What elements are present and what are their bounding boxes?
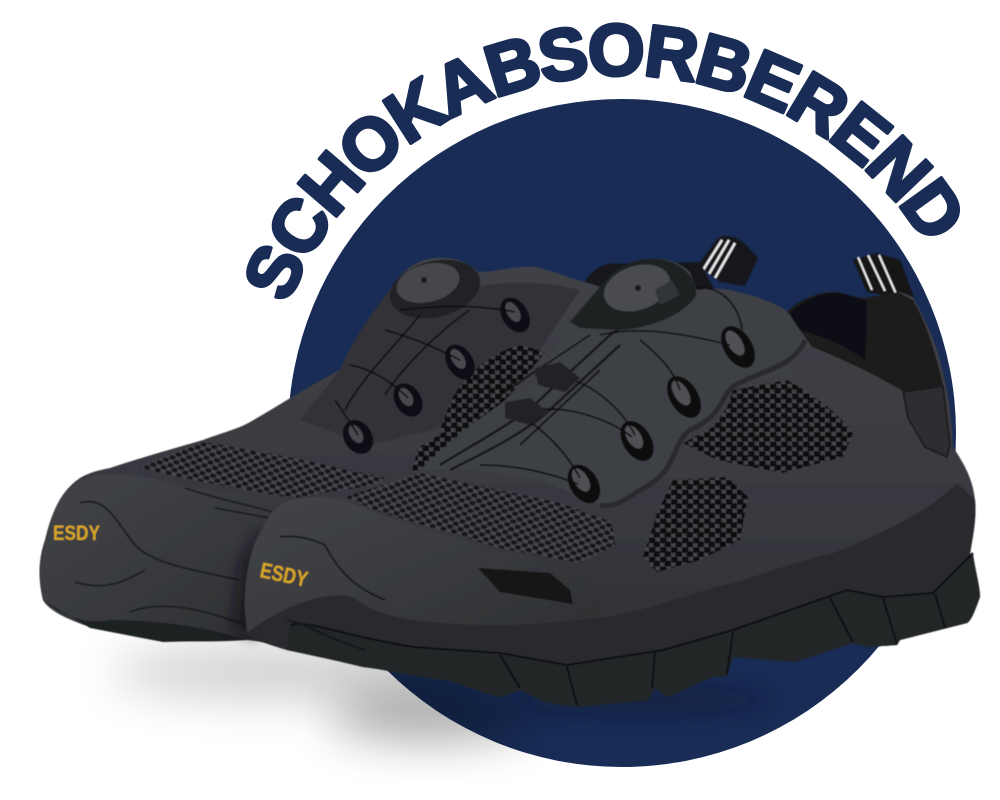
front shoe toe mesh [345, 473, 615, 563]
front shoe inner opening [790, 293, 867, 360]
front shoe heel lining [787, 292, 943, 392]
front shoe outsole lugs [287, 553, 980, 707]
back shoe silhouette [39, 258, 640, 650]
front shoe ESDY logo: ESDY [258, 557, 310, 592]
front shoe eyelets [561, 320, 762, 509]
front shoe midsole [247, 483, 980, 707]
front shoe [245, 253, 980, 707]
front shoe silhouette [245, 259, 980, 707]
back shoe lower honeycomb [412, 425, 480, 478]
front shoe side mesh lower [643, 477, 748, 572]
back shoe eyelets [337, 292, 536, 460]
front shoe tread grooves [290, 553, 973, 705]
front shoe lace panel edge [600, 340, 805, 506]
back shoe sole lines [75, 488, 272, 625]
shade between the two toes [232, 525, 262, 640]
front shoe toe cap [245, 497, 605, 650]
back shoe [39, 236, 758, 650]
back shoe collar [583, 262, 720, 320]
front shoe laces [480, 288, 742, 484]
navy circle background [288, 99, 956, 767]
front shoe lace guides [505, 362, 580, 425]
front shoe pull tab [853, 253, 914, 310]
curved title: SCHOKABSORBEREND [246, 22, 960, 300]
front shoe side reinforcement strip [478, 568, 573, 604]
ground shadow [110, 646, 770, 739]
front shoe dial [570, 257, 696, 330]
back shoe inner honeycomb [440, 345, 545, 440]
back shoe laces [335, 306, 515, 435]
back shoe ESDY logo: ESDY [53, 522, 100, 545]
front shoe lace stitching [440, 300, 660, 470]
front shoe heel badge [903, 386, 950, 457]
front shoe toe seam [280, 536, 385, 650]
back shoe toe cap [40, 474, 290, 640]
back shoe pull tab [698, 236, 758, 286]
back shoe dial [384, 251, 486, 327]
back shoe lower sole shade [43, 600, 248, 642]
front shoe side mesh upper [683, 380, 853, 473]
back shoe lace panel [300, 283, 580, 445]
front shoe lace panel [420, 292, 805, 505]
back shoe toe mesh [140, 442, 385, 498]
